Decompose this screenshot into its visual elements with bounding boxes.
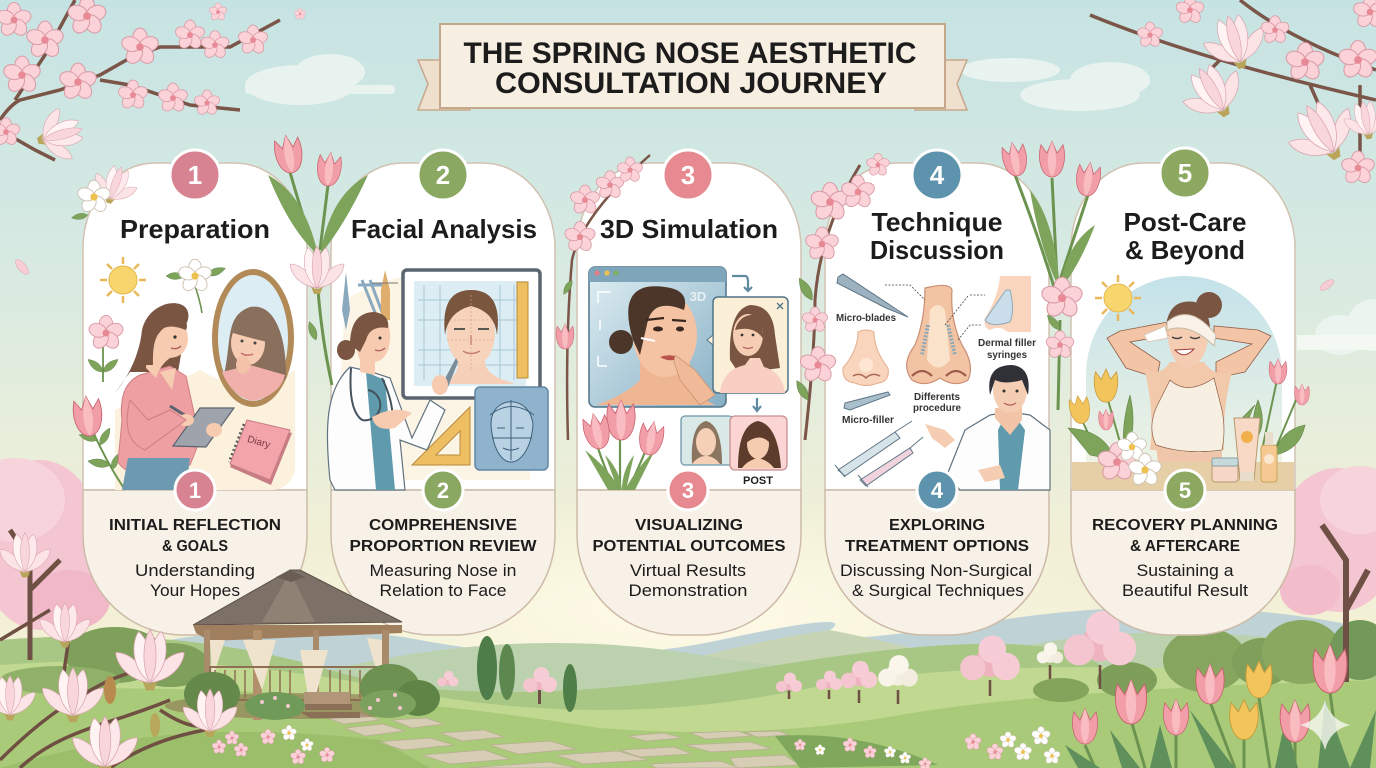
text block: Understanding [135, 561, 255, 580]
icon: micro-blade [837, 274, 908, 317]
panel: step 5 post-care [1068, 148, 1309, 635]
flowers [1068, 359, 1309, 487]
heading: Discussion [870, 235, 1004, 265]
label [913, 391, 961, 414]
number badge lower: 3 [682, 478, 694, 503]
text block [350, 517, 537, 600]
text block: EXPLORING [889, 517, 985, 534]
number badge top [170, 150, 220, 200]
window: 3D face view [589, 267, 726, 407]
panel: step 4 technique [825, 150, 1050, 635]
label: POST [743, 475, 773, 487]
number badge lower: 4 [931, 478, 944, 503]
icon: small nose [843, 330, 888, 386]
icon: large nose [907, 285, 970, 384]
icon: measuring tools [342, 270, 398, 330]
tulips [581, 400, 666, 490]
label: syringes [987, 349, 1027, 361]
label: Micro-blades [836, 312, 896, 324]
text block: Discussing Non-Surgical [840, 561, 1032, 580]
gazebo [165, 570, 440, 720]
text block [840, 517, 1032, 600]
text block [1092, 517, 1278, 600]
text block: TREATMENT OPTIONS [845, 538, 1029, 555]
text block: Virtual Results [630, 561, 746, 580]
text block: Relation to Face [380, 581, 506, 600]
text block: POTENTIAL OUTCOMES [592, 538, 786, 555]
number badge top [418, 150, 468, 200]
foreground flowers [0, 725, 1061, 768]
person: woman stretching [1107, 292, 1271, 462]
left pink blossom tree [0, 458, 110, 660]
heading: & Beyond [1125, 235, 1245, 265]
text block: & GOALS [162, 538, 228, 555]
heading: Technique [872, 207, 1002, 237]
flowers between cards 1 and 2 [71, 133, 368, 385]
text block: COMPREHENSIVE [369, 517, 517, 534]
number badge top: 4 [930, 160, 945, 190]
label: Micro-filler [842, 414, 894, 426]
illustration: post-care [1068, 275, 1309, 490]
icon: diary notebook: Diary [246, 434, 271, 451]
heading: Post-Care [1124, 207, 1246, 237]
text block: INITIAL REFLECTION [109, 517, 281, 534]
number badge lower: 2 [437, 478, 449, 503]
number badge lower [423, 470, 463, 510]
text block: Measuring Nose in [370, 561, 516, 580]
number badge top: 3 [681, 160, 695, 190]
heading: Facial Analysis [351, 214, 537, 244]
illustration: preparation [72, 257, 295, 490]
arrow: curved [732, 276, 752, 291]
window: 3D face view: 3D [690, 289, 706, 304]
text block: RECOVERY PLANNING [1092, 517, 1278, 534]
heading: Preparation [120, 214, 270, 244]
text block: VISUALIZING [635, 517, 743, 534]
leader lines [885, 285, 985, 340]
flowers between cards 4 and 5 [1000, 141, 1102, 410]
number badge top [1160, 148, 1210, 198]
number badge lower: 1 [189, 478, 201, 503]
cherry branch top left [0, 0, 306, 166]
label: Differents [914, 391, 960, 403]
dark woodland left [0, 627, 210, 694]
distant hills [0, 607, 1376, 768]
panel: step 2 facial analysis [327, 150, 555, 635]
number badge top [912, 150, 962, 200]
stone path [322, 713, 800, 768]
icon: micro tool [844, 392, 890, 410]
heading: 3D Simulation [600, 214, 778, 244]
clouds [245, 54, 1376, 355]
illustration: 3D simulation [581, 267, 788, 490]
sparkle [1300, 700, 1350, 750]
number badge lower: 5 [1179, 478, 1191, 503]
number badge top [663, 150, 713, 200]
right shrubs [1033, 620, 1376, 702]
icon: triangle ruler [412, 407, 470, 465]
label: procedure [913, 402, 961, 414]
panel: step 1 preparation [72, 150, 307, 635]
label: Dermal filler [978, 337, 1036, 349]
person: doctor [327, 312, 458, 490]
title banner: CONSULTATION JOURNEY [495, 67, 887, 100]
text block: PROPORTION REVIEW [350, 538, 537, 555]
text block: Your Hopes [150, 581, 240, 600]
foreground tulips [1065, 645, 1376, 768]
window: popup portrait [707, 297, 788, 393]
title banner: THE SPRING NOSE AESTHETIC [464, 37, 916, 70]
number badge lower [668, 470, 708, 510]
label [978, 337, 1036, 361]
panel: step 3 simulation [577, 150, 801, 635]
magnolia branches bottom left [0, 533, 237, 768]
icon: diary notebook [229, 420, 292, 485]
arrow: down [753, 398, 761, 411]
petals [13, 258, 1336, 292]
number badge lower [917, 470, 957, 510]
number badge top: 5 [1178, 158, 1192, 188]
text block: Sustaining a [1136, 561, 1234, 580]
number badge top: 1 [188, 160, 202, 190]
heading [870, 207, 1004, 265]
icon: mirror [212, 269, 294, 407]
number badge lower [175, 470, 215, 510]
icon: syringes [835, 421, 923, 487]
cherry branch between cards 3 and 4 [793, 153, 891, 440]
text block [592, 517, 786, 600]
text block: & AFTERCARE [1130, 538, 1240, 555]
number badge top: 2 [436, 160, 450, 190]
cherry branch beside card 3 [556, 155, 650, 440]
person: woman with tablet [115, 303, 234, 490]
icon: monitor with face [403, 270, 540, 398]
number badge lower [1165, 470, 1205, 510]
title banner [418, 24, 967, 110]
text block: Beautiful Result [1122, 581, 1248, 600]
icon: side nose [985, 276, 1031, 332]
heading [1124, 207, 1246, 265]
before and after portraits [681, 416, 787, 470]
text block: Demonstration [628, 581, 748, 600]
icon: blue face scan card [475, 387, 548, 470]
illustration: technique [835, 274, 1050, 490]
text block [109, 517, 281, 600]
right pink blossom tree [1278, 466, 1376, 682]
illustration: facial analysis [327, 270, 548, 490]
text block: & Surgical Techniques [852, 581, 1024, 600]
skincare products [1212, 418, 1277, 482]
icon: sun [1095, 275, 1141, 321]
distant trees [438, 611, 1136, 712]
magnolia branch top right [1090, 0, 1376, 185]
person: doctor explaining [925, 365, 1050, 490]
